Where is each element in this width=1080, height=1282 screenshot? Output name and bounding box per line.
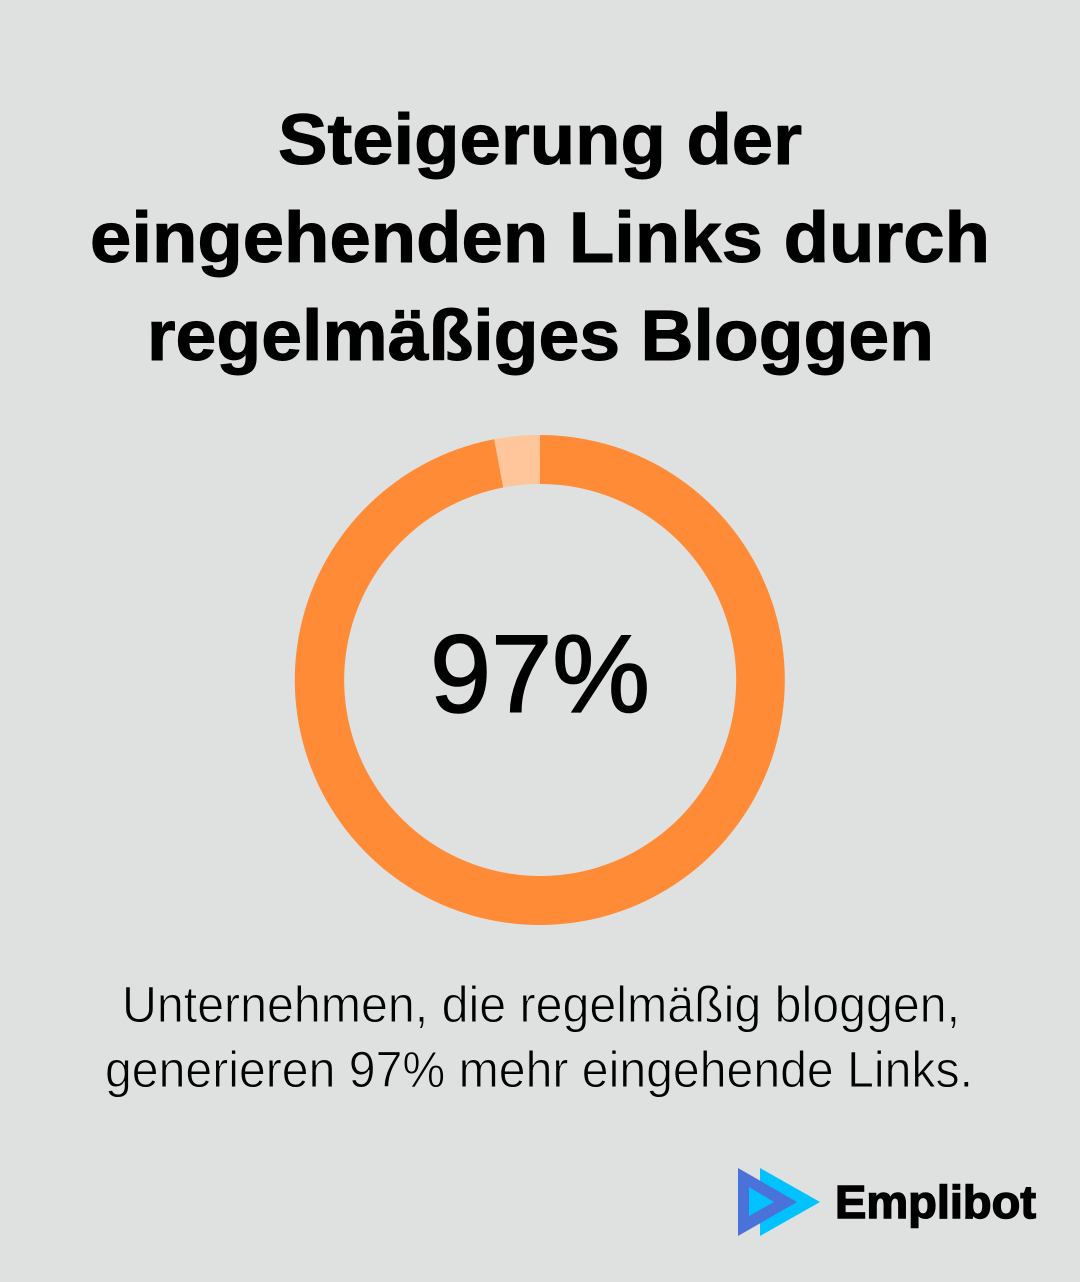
title: [90, 101, 990, 376]
logo wordmark: Emplibot: [835, 1176, 1036, 1228]
description text: Unternehmen, die regelmäßig bloggen,: [122, 976, 960, 1033]
icon: play triangles: [738, 1168, 820, 1236]
title: regelmäßiges Bloggen: [147, 297, 934, 376]
title: eingehenden Links durch: [90, 199, 990, 278]
logo: Emplibot: [738, 1168, 1036, 1236]
donut segment: 97 percent: [295, 435, 785, 925]
donut centre value: 97%: [430, 613, 650, 736]
donut chart: 97 percent: [295, 435, 785, 925]
description text: [105, 976, 973, 1098]
title: Steigerung der: [278, 101, 802, 180]
description text: generieren 97% mehr eingehende Links.: [105, 1041, 973, 1098]
donut segment: remaining 3 percent: [494, 435, 540, 488]
